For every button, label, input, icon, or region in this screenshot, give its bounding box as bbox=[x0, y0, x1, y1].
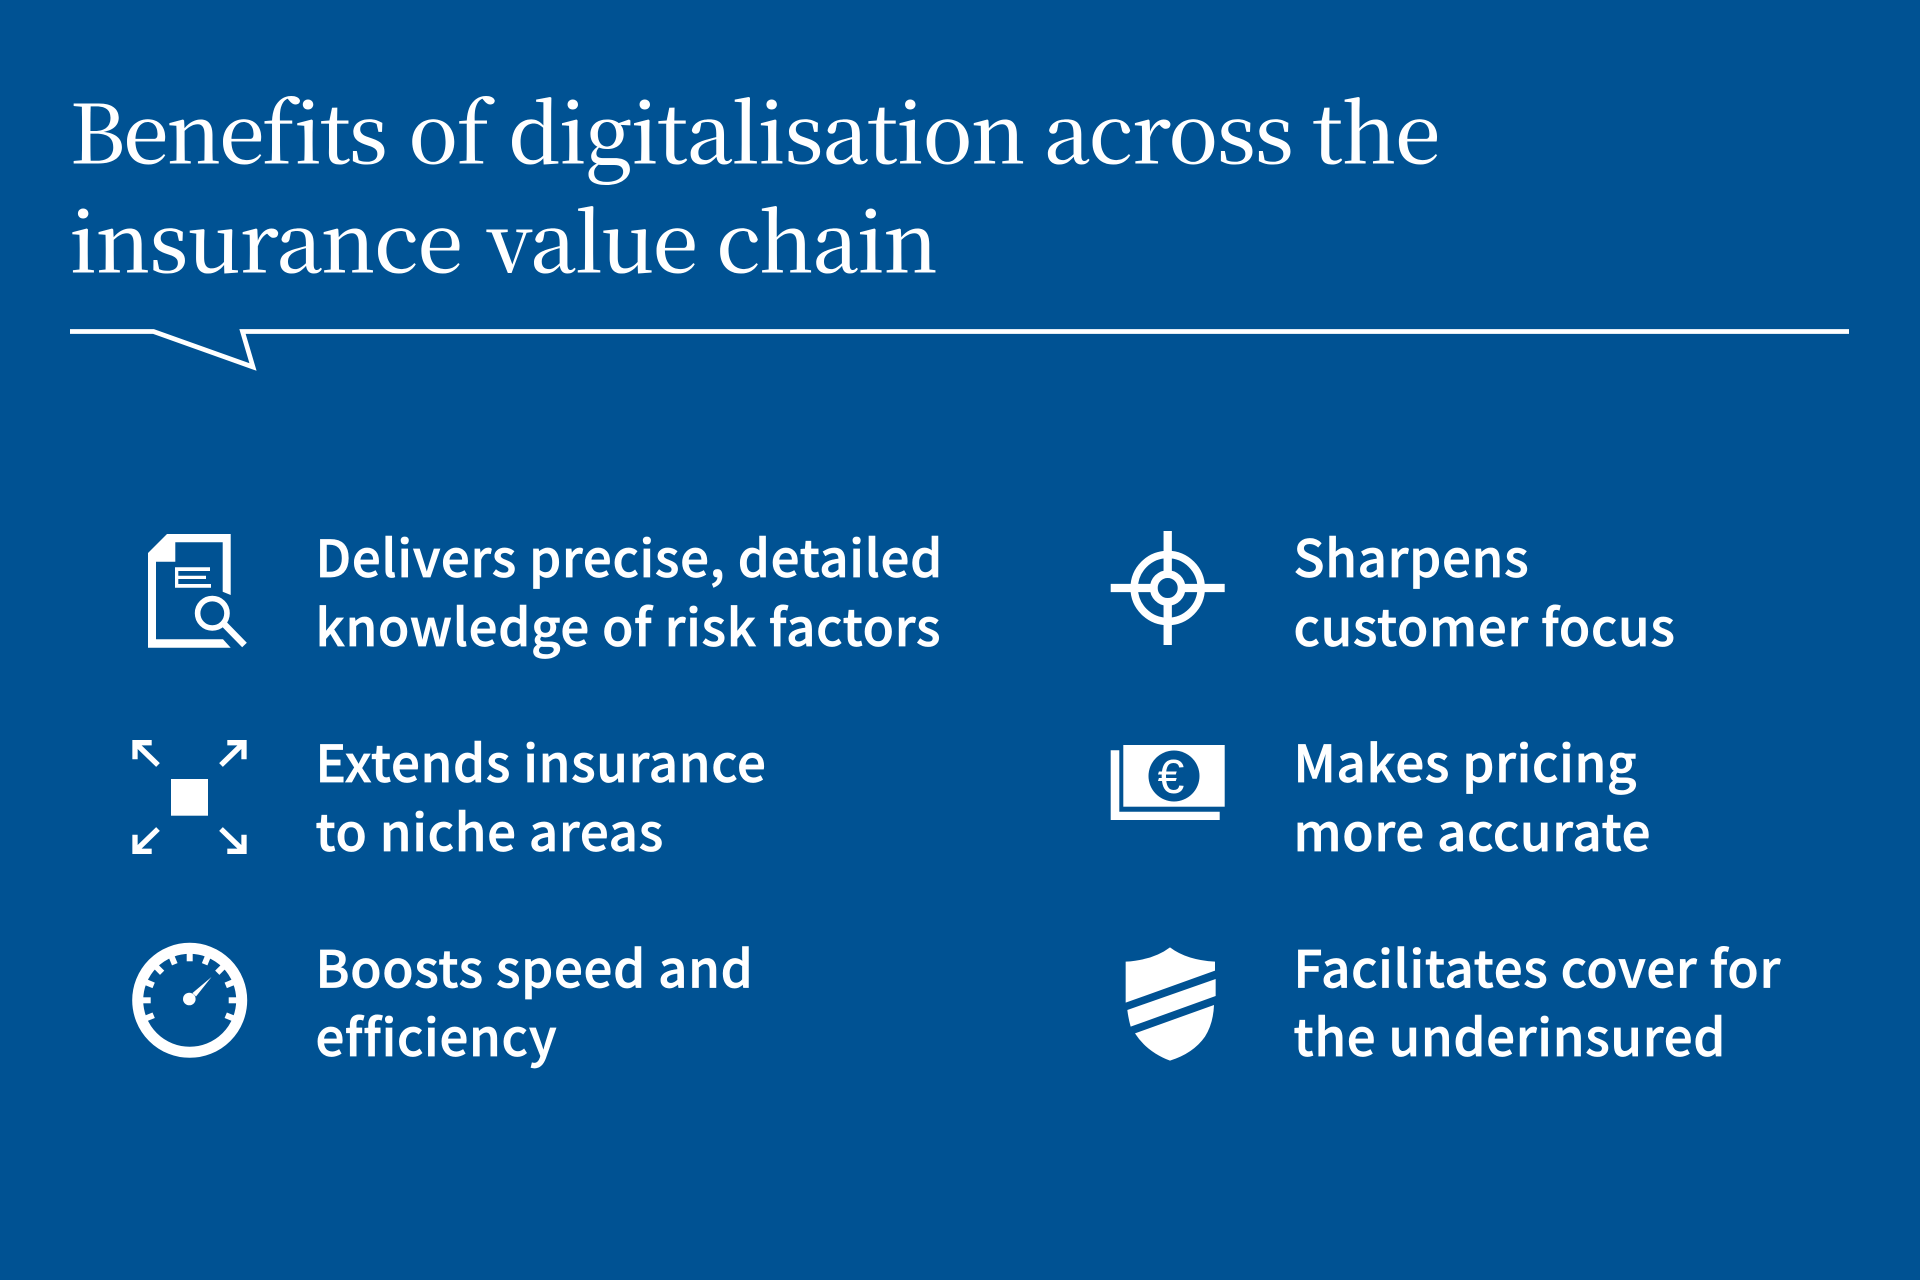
text: speed and efficiency bbox=[316, 928, 753, 1071]
icon: target crosshair bbox=[1111, 531, 1225, 645]
text: customer focus: Sharpens bbox=[1294, 518, 1529, 592]
text: customer focus: customer focus bbox=[1294, 587, 1676, 661]
title: Benefits of digitalisation across the bbox=[70, 70, 1439, 187]
text: underinsured: Facilitates cover for bbox=[1294, 928, 1781, 1002]
text: pricing: Makes pricing bbox=[1294, 723, 1637, 797]
text: pricing: more accurate bbox=[1294, 792, 1651, 866]
text: precise knowledge: knowledge of risk factors bbox=[316, 587, 941, 661]
speech-bubble title rule bbox=[70, 332, 1849, 367]
icon: expanding arrows bbox=[135, 743, 244, 851]
text: precise knowledge: Delivers precise, detailed bbox=[316, 518, 943, 592]
text: niche areas bbox=[316, 723, 767, 866]
title: insurance value chain bbox=[70, 180, 937, 296]
icon: euro banknotes: € bbox=[1158, 751, 1185, 804]
icon: document with magnifier bbox=[148, 534, 244, 648]
text: niche areas: Extends insurance bbox=[316, 723, 767, 797]
text: speed and efficiency: efficiency bbox=[316, 997, 557, 1071]
icon: speedometer bbox=[138, 948, 242, 1052]
text: niche areas: to niche areas bbox=[316, 792, 664, 866]
text: pricing bbox=[1294, 723, 1651, 866]
text: underinsured bbox=[1294, 928, 1781, 1071]
text: precise knowledge bbox=[316, 518, 943, 661]
text: underinsured: the underinsured bbox=[1294, 997, 1726, 1071]
icon: euro banknotes bbox=[1111, 745, 1225, 820]
icon: shield bbox=[1126, 947, 1216, 1061]
title bbox=[70, 70, 1439, 296]
text: customer focus bbox=[1294, 518, 1676, 661]
text: speed and efficiency: Boosts speed and bbox=[316, 928, 753, 1002]
